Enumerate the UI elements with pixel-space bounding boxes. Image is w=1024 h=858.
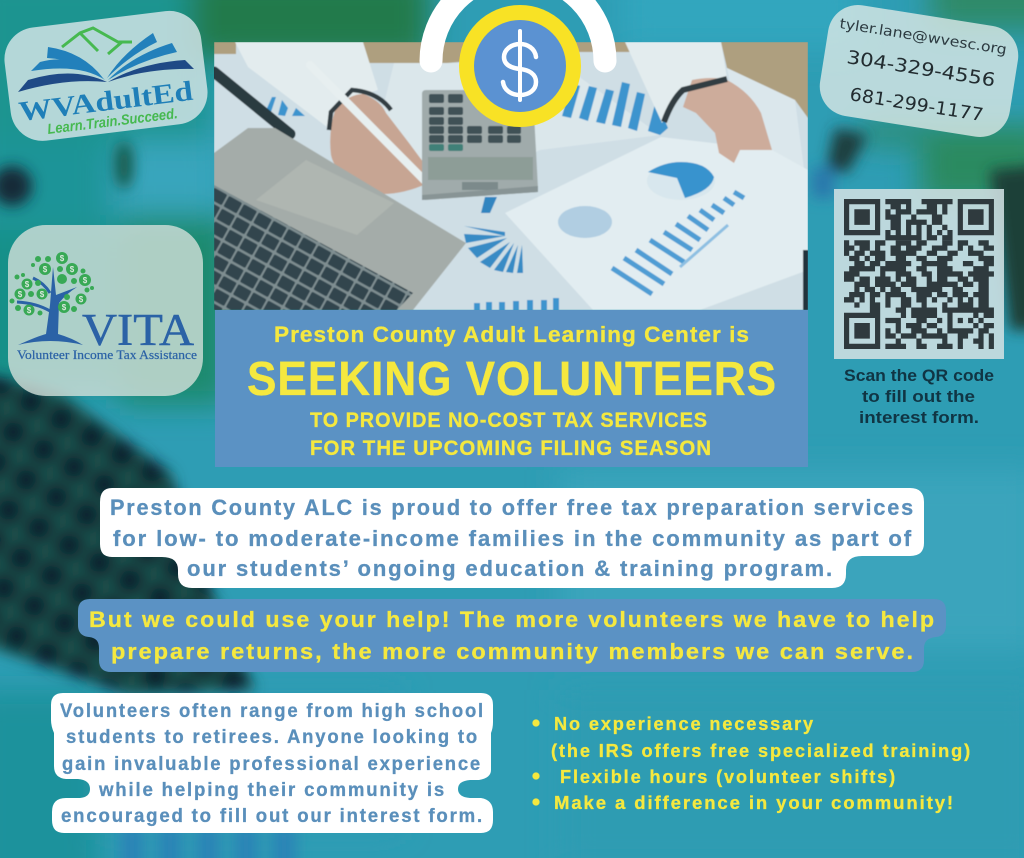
logo card: WVAdultEd	[1, 7, 211, 145]
main headline: SEEKING VOLUNTEERS	[247, 353, 777, 406]
QR code	[844, 202, 994, 346]
volunteers text block	[51, 693, 493, 833]
chart: pie charts	[558, 162, 715, 238]
calculator	[422, 90, 538, 200]
benefits bullet list	[532, 713, 972, 813]
photo tint	[214, 42, 808, 310]
QR caption	[844, 366, 994, 427]
laptop	[214, 128, 466, 310]
VITA wordmark: VITA	[82, 305, 195, 355]
icon: money tree: $	[60, 254, 65, 263]
white arc above coin	[431, 0, 605, 61]
headline panel: FOR THE UPCOMING FILING SEASON	[310, 437, 712, 460]
email: tyler.lane@wvesc.org	[838, 16, 1008, 58]
papers	[384, 63, 658, 159]
benefits bullet list: Make a difference in your community!	[554, 792, 955, 813]
icon: money tree: $	[83, 276, 88, 285]
QR code panel	[834, 189, 1004, 359]
intro text block	[100, 488, 924, 588]
desk	[214, 42, 808, 310]
intro text block: our students’ ongoing education & training program.	[187, 556, 834, 581]
icon: money tree: $	[18, 290, 23, 299]
icon: money tree: $	[25, 280, 30, 289]
icon: money tree: $	[79, 295, 84, 304]
icon: open book and mountains	[18, 28, 194, 92]
headline panel	[215, 310, 808, 467]
QR caption: to fill out the	[862, 387, 975, 406]
right hand	[683, 78, 772, 163]
icon: money tree: $	[40, 290, 45, 299]
headline subtext: TO PROVIDE NO-COST TAX SERVICES	[310, 409, 708, 432]
sleeves	[235, 42, 378, 127]
volunteers text block: encouraged to fill out our interest form.	[61, 805, 484, 827]
icon: money tree: $	[27, 306, 32, 315]
QR caption: Scan the QR code	[844, 366, 994, 385]
VITA full name: Volunteer Income Tax Assistance	[17, 348, 197, 362]
icon: dollar coin	[459, 5, 581, 127]
call-for-help text block: prepare returns, the more community members we can serve.	[111, 639, 915, 664]
contact card	[815, 1, 1023, 141]
call-for-help text block: But we could use your help! The more volunteers we have to help	[89, 607, 936, 632]
intro text block: Preston County ALC is proud to offer free tax preparation services	[110, 495, 915, 520]
intro text block: for low- to moderate-income families in the community as part of	[113, 526, 913, 551]
volunteers text block: while helping their community is	[98, 779, 446, 801]
volunteers text block: Volunteers often range from high school	[60, 700, 485, 722]
black pen	[214, 72, 290, 134]
icon: money tree	[10, 252, 94, 345]
white pen	[338, 94, 423, 184]
phone 2: 681-299-1177	[848, 84, 985, 126]
phone 1: 304-329-4556	[845, 47, 997, 91]
logo card: VITA	[8, 225, 203, 396]
icon: money tree: $	[62, 303, 67, 312]
hero photo: desk with laptop, calculator and charts	[214, 42, 808, 310]
volunteers text block: students to retirees. Anyone looking to	[66, 726, 479, 748]
volunteers text block: gain invaluable professional experience	[62, 753, 482, 775]
headline lead-in: Preston County Adult Learning Center is	[274, 322, 750, 347]
icon: money tree: $	[70, 265, 75, 274]
logo tagline: Learn.Train.Succeed.	[47, 106, 179, 138]
benefits bullet list: No experience necessary	[554, 713, 815, 734]
icon: money tree: $	[43, 265, 48, 274]
chart: radial fan	[464, 226, 523, 273]
QR caption: interest form.	[859, 408, 979, 427]
left hand	[330, 94, 429, 194]
logo wordmark: WVAdultEd	[17, 76, 195, 128]
chart: top bars	[562, 82, 668, 135]
benefits bullet list: Flexible hours (volunteer shifts)	[560, 766, 897, 787]
chart: diagonal bars	[612, 192, 744, 294]
chart: bottom bars	[474, 298, 559, 310]
benefits bullet list: (the IRS offers free specialized training)	[551, 740, 972, 761]
call-for-help text block	[78, 599, 946, 672]
